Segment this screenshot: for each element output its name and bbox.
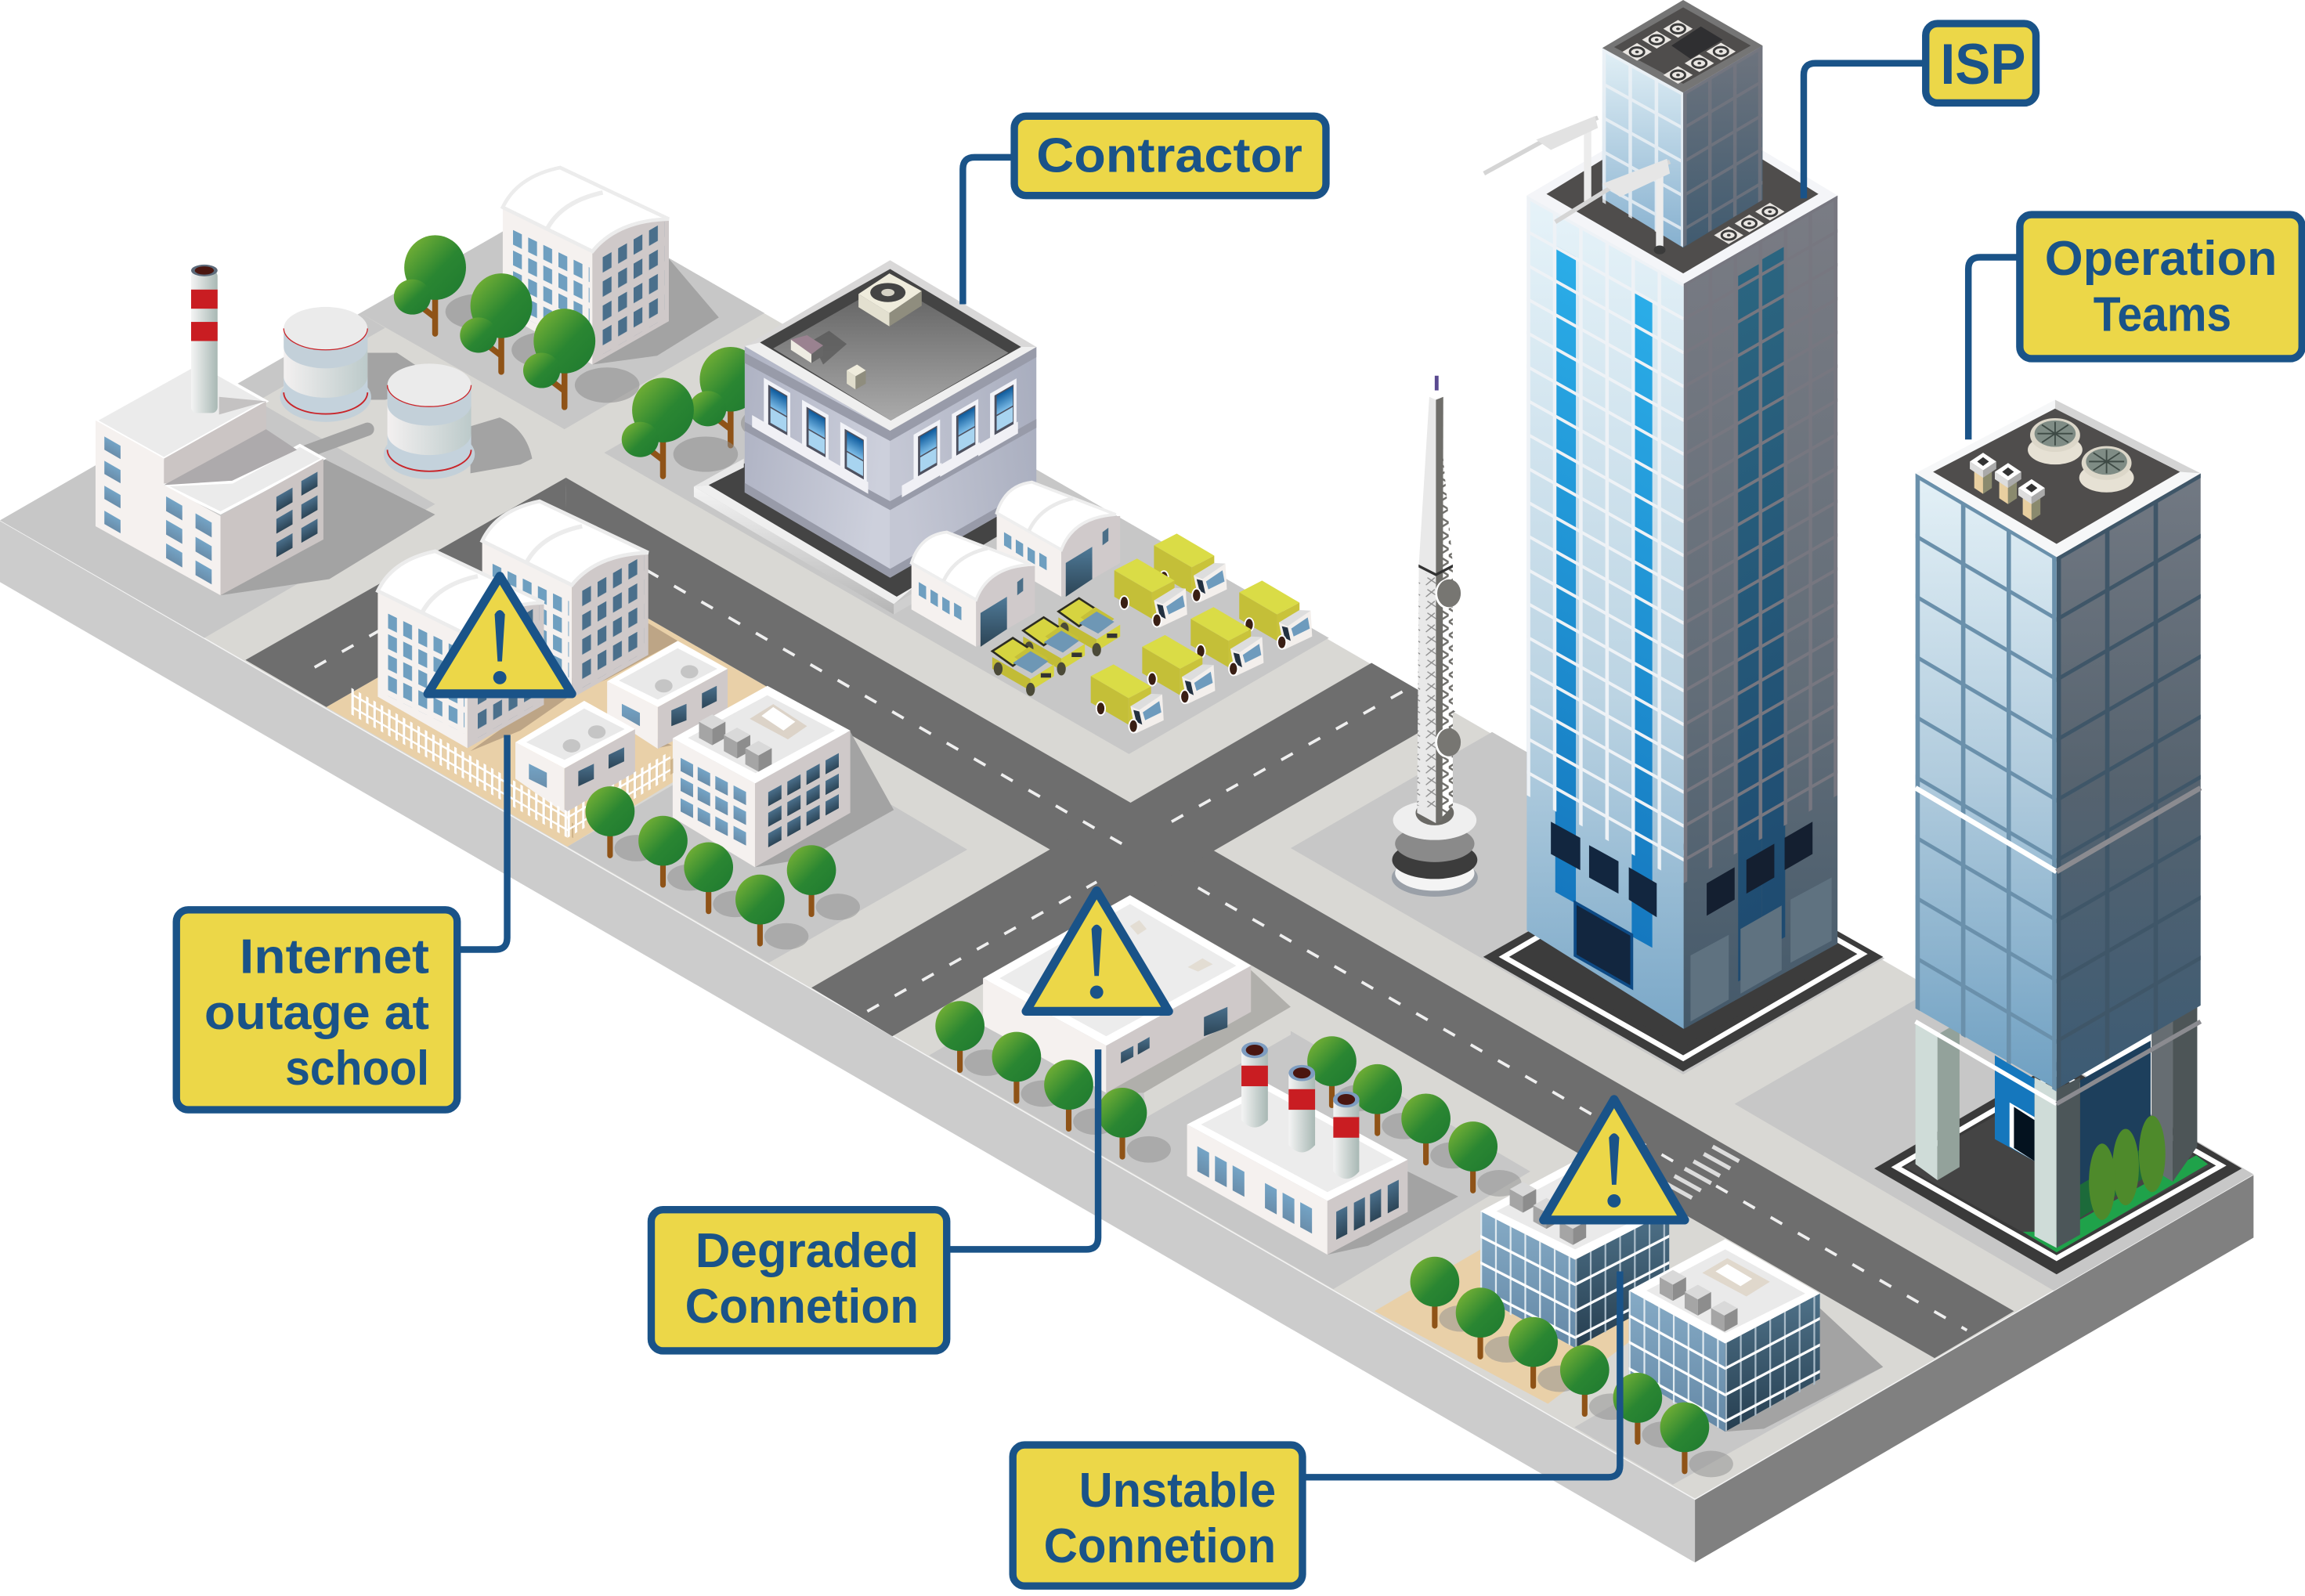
- warning icon: unstable: [1544, 1100, 1685, 1220]
- lower windows and entrance: [1551, 821, 1832, 1021]
- ground plots: [0, 197, 2253, 1485]
- office tower, second: [1629, 1239, 1820, 1432]
- pickup jeeps: [992, 598, 1120, 696]
- yard shadows: [471, 623, 677, 751]
- factory windows: [104, 436, 317, 586]
- main roof: [1526, 103, 1837, 283]
- callout: contractor: [1014, 116, 1326, 196]
- entrance: [1995, 1041, 2151, 1185]
- rooftop antennas: [1484, 116, 1670, 255]
- storage tanks: [280, 307, 475, 479]
- office tower with unstable connection: [1480, 1161, 1669, 1348]
- beige yards: [327, 570, 1683, 1403]
- roof fans: [2028, 418, 2134, 493]
- facade stripes and grid: [1526, 196, 1837, 1013]
- trees along school: [586, 786, 860, 950]
- callout: internet outage at school: Internet: [240, 930, 429, 984]
- tank: [280, 307, 371, 422]
- callout: degraded connetion: [651, 1210, 947, 1351]
- roof vents: [1970, 453, 2045, 520]
- ISP skyscraper: [1483, 0, 1883, 1071]
- office block in school plot: [673, 686, 851, 867]
- factory with chimney: [96, 265, 323, 595]
- school annex B: [515, 701, 635, 814]
- callout: internet outage at school: school: [285, 1042, 429, 1096]
- communications tower: [1392, 376, 1478, 897]
- base: [1874, 1061, 2242, 1274]
- storage huts: [912, 482, 1120, 647]
- small factory: [1187, 1042, 1407, 1255]
- warning icon: school: [428, 576, 572, 694]
- callout: operation teams: Teams: [2094, 287, 2231, 341]
- callout: degraded connetion: Degraded: [695, 1224, 919, 1278]
- bushes: [2089, 1116, 2166, 1220]
- base: [1483, 843, 1883, 1071]
- trees, north plot: [394, 235, 806, 476]
- tower body: [1916, 473, 2201, 1104]
- connector lines: [457, 63, 2020, 1477]
- chimney: [191, 265, 218, 413]
- callout: degraded connetion: Connetion: [685, 1280, 919, 1334]
- tower base: [1392, 800, 1478, 897]
- chimneys: [1241, 1042, 1360, 1179]
- trees, front row: [935, 1001, 1171, 1163]
- sidewalk wedge between low building and factory: [1143, 1007, 1291, 1117]
- roads: [245, 478, 2014, 1358]
- callout: operation teams: [2020, 215, 2302, 359]
- school annex A: [607, 641, 728, 749]
- callout: ISP: [1926, 23, 2036, 103]
- roof units: [791, 330, 866, 389]
- callout: operation teams: Operation: [2045, 232, 2277, 286]
- rooftop AC unit: [858, 273, 922, 327]
- callout: contractor: Contractor: [1036, 129, 1302, 183]
- arched building, north plot: [503, 168, 669, 364]
- shadows: [221, 258, 1883, 1432]
- roof vents: [1714, 203, 1785, 244]
- callout: unstable connetion: Connetion: [1044, 1519, 1276, 1573]
- warning icon: degraded: [1026, 890, 1169, 1011]
- contractor building: [694, 260, 1058, 615]
- callout: unstable connetion: Unstable: [1079, 1464, 1276, 1518]
- callout: internet outage at school: outage at: [204, 986, 429, 1040]
- roof: [1916, 400, 2201, 557]
- callout: unstable connetion: [1013, 1445, 1302, 1586]
- pillars: [1916, 1006, 2197, 1248]
- operation teams tower: [1874, 400, 2242, 1274]
- contractor windows: [752, 371, 1018, 500]
- callout: ISP: ISP: [1941, 32, 2025, 96]
- road markings: [315, 570, 1967, 1331]
- callout: internet outage at school: [176, 910, 457, 1110]
- trees, back row factory plot: [1307, 1036, 1522, 1197]
- trees, office plot: [1411, 1257, 1733, 1477]
- school buildings: [378, 501, 649, 748]
- tank: [384, 363, 475, 479]
- low building with degraded connection: [983, 895, 1251, 1093]
- delivery trucks: [1091, 533, 1312, 734]
- upper block: [1602, 0, 1762, 247]
- school fence: [352, 688, 676, 841]
